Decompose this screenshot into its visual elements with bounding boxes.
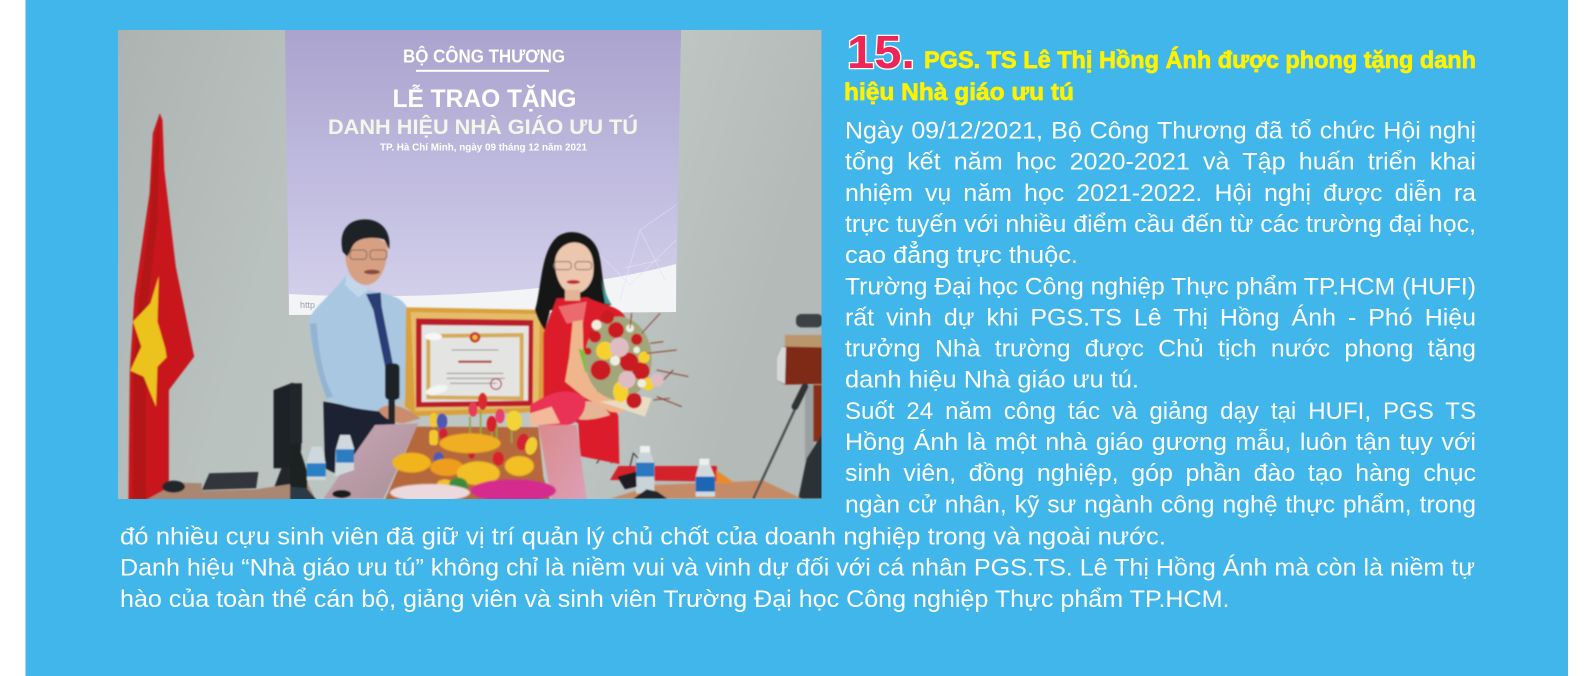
projection screen: BỘ CÔNG THƯƠNG [403,46,565,67]
bouquet [565,311,688,417]
projection screen: http [300,300,315,310]
number 15: 15. [847,26,915,78]
body text: paragraph 2: Trường Đại học Công nghiệp Thực phẩm TP.HCM (HUFI) [845,273,1476,300]
projection screen: TP. Hà Chí Minh, ngày 09 tháng 12 năm 2021 [380,143,587,154]
table left [146,482,316,500]
body text: paragraph 1 [845,118,1477,269]
hand and wrap [569,401,610,420]
body text: paragraph 3: ngàn cử nhân, kỹ sư ngành công nghệ thực phẩm, trong [845,491,1476,518]
right side furniture [597,314,823,499]
projection screen [285,30,681,315]
body text: paragraph 1: trực tuyến với nhiều điểm cầu đến từ các trường đại học, [845,211,1476,238]
body text: paragraph 1: nhiệm vụ năm học 2021-2022. Hội nghị được diễn ra [845,180,1477,207]
heading [844,46,1476,106]
heading: hiệu Nhà giáo ưu tú [844,79,1074,106]
body text: paragraph 2: trưởng Nhà trường được Chủ tịch nước phong tặng [845,336,1476,363]
body text: paragraph 1: Ngày 09/12/2021, Bộ Công Thương đã tổ chức Hội nghị [845,118,1476,144]
body text: paragraph 3: đó nhiều cựu sinh viên đã giữ vị trí quản lý chủ chốt của doanh nghiệp trong và ngoài nước. [120,524,1166,550]
certificate frame [405,307,545,416]
body text: paragraph 1: cao đẳng trực thuộc. [845,240,1078,269]
water bottles [636,446,715,497]
keyboard [202,472,258,490]
body text: paragraph 3: sinh viên, đồng nghiệp, góp phần đào tạo hàng chục [845,460,1476,487]
projection screen: LỄ TRAO TẶNG [392,83,576,113]
foreground flowers [390,479,556,502]
man [308,219,421,473]
tulips [429,393,539,466]
photo: award ceremony [118,30,823,502]
heading: PGS. TS Lê Thị Hồng Ánh được phong tặng danh [924,46,1476,74]
projection screen: DANH HIỆU NHÀ GIÁO ƯU TÚ [328,115,638,139]
body text: paragraph 4 [120,555,1475,613]
monitor [274,383,302,468]
bottles left [307,447,326,480]
microphone [385,363,400,400]
body text: paragraph 4: Danh hiệu “Nhà giáo ưu tú” không chỉ là niềm vui và vinh dự đối với cá nhân PGS.TS. Lê Thị Hồng Ánh mà còn là niềm tự [120,555,1475,582]
body text: paragraph 3: Hồng Ánh là một nhà giáo gương mẫu, luôn tận tụy với [845,429,1476,456]
body text: paragraph 4: hào của toàn thể cán bộ, giảng viên và sinh viên Trường Đại học Công nghiệp Thực phẩm TP.HCM. [120,586,1230,613]
body text: paragraph 2: rất vinh dự khi PGS.TS Lê Thị Hồng Ánh - Phó Hiệu [845,304,1476,331]
wall [118,30,822,499]
flag [128,113,316,500]
body text: paragraph 3: Suốt 24 năm công tác và giảng dạy tại HUFI, PGS TS [845,398,1476,425]
body text: paragraph 1: tổng kết năm học 2020-2021 và Tập huấn triển khai [845,149,1476,176]
woman with bouquet [530,232,688,464]
body text: paragraph 3 [120,398,1476,550]
body text: paragraph 2 [845,273,1476,394]
body text: paragraph 2: danh hiệu Nhà giáo ưu tú. [845,367,1139,394]
yellow blooms [392,433,534,492]
desk and flowers [290,383,587,502]
